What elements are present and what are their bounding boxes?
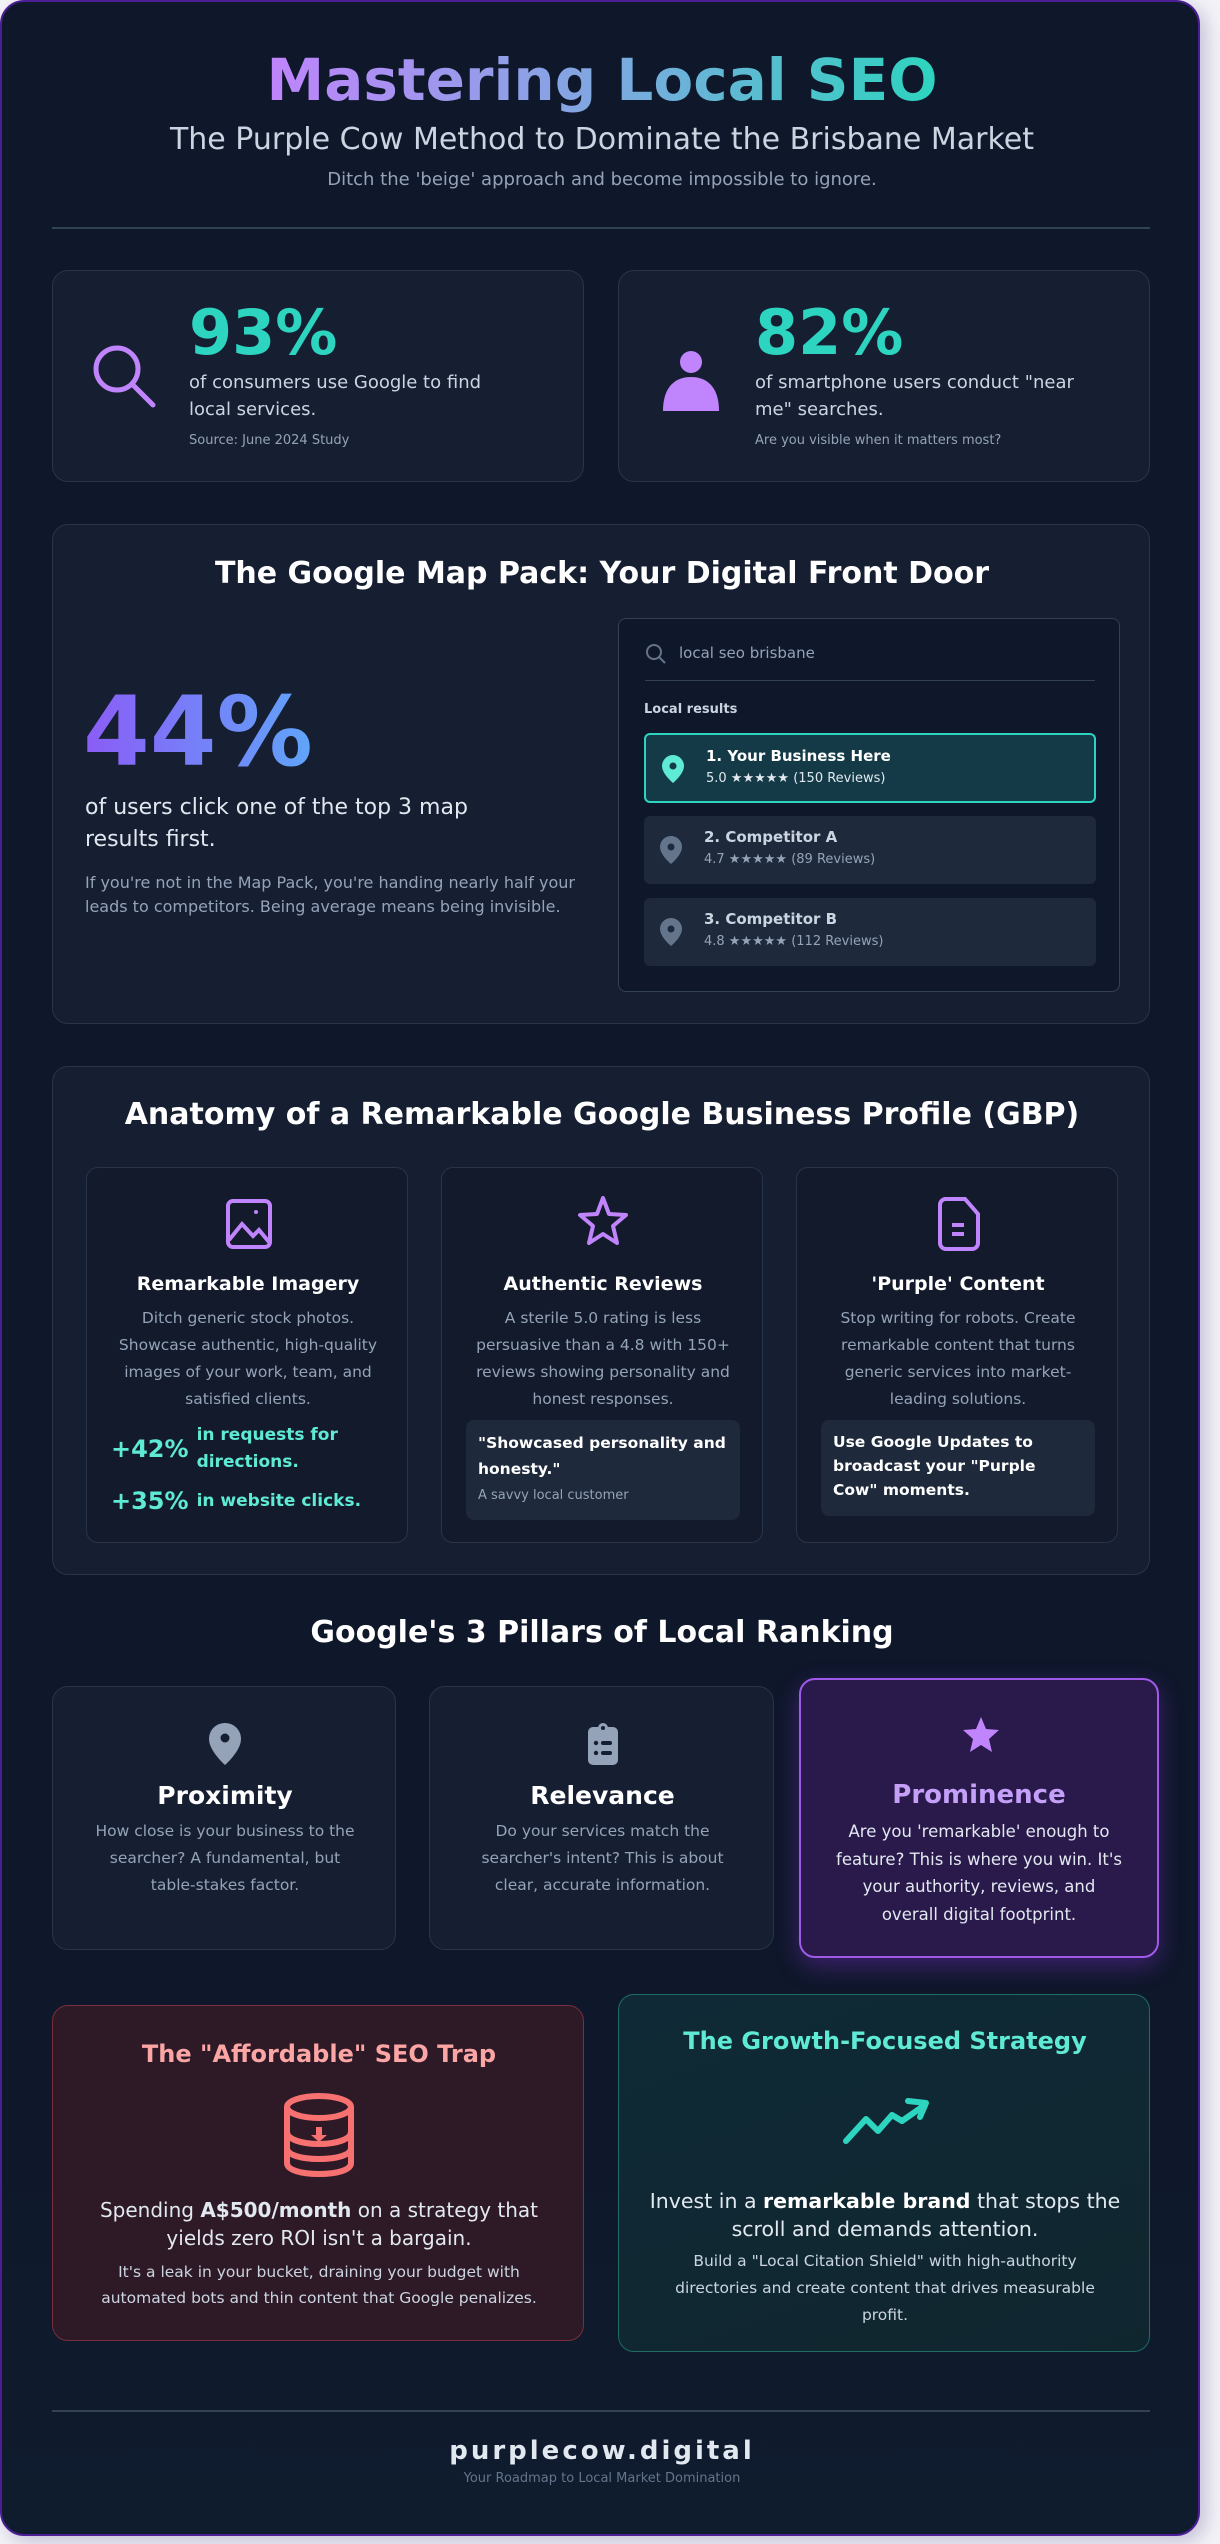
- search mockup: [618, 618, 1120, 992]
- footer brand: purplecow.digital: [449, 2436, 755, 2466]
- tip box: Use Google Updates to broadcast your "Purple Cow" moments.: [833, 1433, 1035, 1499]
- panel: affordable SEO trap: It's a leak in your bucket, draining your budget with automated bots and thin content that Google penalizes.: [101, 2263, 537, 2307]
- stat: +35%: in website clicks.: [197, 1491, 361, 1511]
- pillar: proximity: [52, 1686, 396, 1950]
- icon: magnifier: [94, 346, 156, 408]
- stat text: of consumers use Google to find local services.: [189, 372, 481, 420]
- card: imagery: Remarkable Imagery: [137, 1273, 359, 1295]
- stat: +42%: [111, 1425, 338, 1472]
- icon: solid star: [963, 1717, 999, 1752]
- card: imagery: [86, 1167, 408, 1543]
- heading: pillars: Google's 3 Pillars of Local Ranking: [310, 1615, 894, 1650]
- stat text: 93%: [189, 296, 337, 369]
- quote box: "Showcased personality and honesty.": [478, 1434, 726, 1478]
- label: local results: Local results: [644, 702, 737, 717]
- icon: image: [226, 1199, 272, 1249]
- icon: document: [938, 1197, 980, 1251]
- result 1: 5.0 ★★★★★ (150 Reviews): [706, 771, 885, 786]
- result 2: [644, 816, 1096, 884]
- panel: growth strategy: Build a "Local Citation Shield" with high-authority directories and create content that drives measurable profit.: [675, 2252, 1095, 2324]
- card: purple content: Stop writing for robots. Create remarkable content that turns generic services into market-leading solutions.: [840, 1309, 1076, 1408]
- icon: trend arrow: [843, 2098, 929, 2144]
- card: imagery: Ditch generic stock photos. Showcase authentic, high-quality images of your work, team, and satisfied clients.: [119, 1309, 377, 1408]
- icon: leaking database: [284, 2093, 354, 2177]
- stat description: of users click one of the top 3 map results first.: [85, 795, 468, 852]
- pillar: prominence (highlighted): Prominence: [892, 1780, 1066, 1810]
- panel: growth strategy: The Growth-Focused Strategy: [683, 2027, 1087, 2055]
- stat: +42%: +42%: [111, 1435, 189, 1463]
- tagline: Ditch the 'beige' approach and become impossible to ignore.: [327, 169, 877, 190]
- stat text: Source: June 2024 Study: [189, 433, 349, 448]
- result 2: 2. Competitor A: [704, 828, 837, 846]
- pillar: prominence (highlighted): Are you 'remarkable' enough to feature? This is where you win. It's your authority, reviews, and overall digital footprint.: [836, 1822, 1122, 1924]
- subtitle: The Purple Cow Method to Dominate the Brisbane Market: [170, 122, 1034, 157]
- stat card: 82%: [618, 270, 1150, 482]
- result 1: [644, 733, 1096, 803]
- quote box: [466, 1420, 740, 1520]
- pillar: relevance: Do your services match the searcher's intent? This is about clear, accurate information.: [481, 1822, 724, 1894]
- tip box: [821, 1420, 1095, 1516]
- panel: affordable SEO trap: [52, 2005, 584, 2341]
- stat: +35%: [111, 1487, 361, 1515]
- card: purple content: [796, 1167, 1118, 1543]
- heading: The Google Map Pack: Your Digital Front Door: [215, 556, 989, 591]
- result 2: 4.7 ★★★★★ (89 Reviews): [704, 852, 875, 867]
- panel: affordable SEO trap: The "Affordable" SEO Trap: [142, 2040, 496, 2068]
- icon: clipboard: [588, 1723, 618, 1765]
- big stat 44%: 44%: [83, 676, 313, 788]
- supporting text: If you're not in the Map Pack, you're handing nearly half your leads to competitors. Being average means being invisible.: [85, 873, 575, 916]
- pillar: prominence (highlighted): [799, 1678, 1159, 1958]
- panel: growth strategy: Invest in a remarkable brand that stops the scroll and demands attention.: [650, 2189, 1120, 2241]
- title: Mastering Local SEO: [266, 46, 938, 114]
- result 3: [644, 898, 1096, 966]
- icon: pin: [209, 1723, 241, 1765]
- heading: Anatomy of a Remarkable Google Business Profile (GBP): [125, 1097, 1079, 1132]
- card: purple content: 'Purple' Content: [871, 1273, 1045, 1295]
- panel: affordable SEO trap: Spending A$500/month on a strategy that yields zero ROI isn't a bargain.: [100, 2198, 538, 2250]
- stat text: 82%: [755, 296, 903, 369]
- icon: star outline: [578, 1196, 628, 1246]
- stat text: of smartphone users conduct "near me" searches.: [755, 372, 1074, 420]
- stat text: [189, 296, 481, 448]
- search bar: [645, 641, 1095, 681]
- pillar: relevance: Relevance: [530, 1781, 675, 1810]
- search bar: local seo brisbane: [679, 644, 815, 662]
- pillar: proximity: Proximity: [157, 1781, 293, 1810]
- stat text: Are you visible when it matters most?: [755, 433, 1001, 448]
- icon: person: [663, 351, 719, 411]
- stat: +42%: in requests for directions.: [197, 1425, 338, 1472]
- pillar: proximity: How close is your business to the searcher? A fundamental, but table-stakes factor.: [95, 1822, 355, 1894]
- card: reviews: Authentic Reviews: [504, 1273, 702, 1295]
- panel: growth strategy: [618, 1994, 1150, 2352]
- result 3: 3. Competitor B: [704, 910, 837, 928]
- card: reviews: [441, 1167, 763, 1543]
- footer tagline: Your Roadmap to Local Market Domination: [464, 2471, 740, 2486]
- panel: map pack: [52, 524, 1150, 1024]
- card: reviews: A sterile 5.0 rating is less persuasive than a 4.8 with 150+ reviews showing personality and honest responses.: [476, 1309, 730, 1408]
- panel: GBP anatomy: [52, 1066, 1150, 1575]
- stat card: 93%: [52, 270, 584, 482]
- stat text: [755, 296, 1074, 448]
- pillar: relevance: [429, 1686, 774, 1950]
- result 1: 1. Your Business Here: [706, 747, 891, 765]
- quote box: A savvy local customer: [478, 1488, 629, 1503]
- result 3: 4.8 ★★★★★ (112 Reviews): [704, 934, 883, 949]
- stat: +35%: +35%: [111, 1487, 189, 1515]
